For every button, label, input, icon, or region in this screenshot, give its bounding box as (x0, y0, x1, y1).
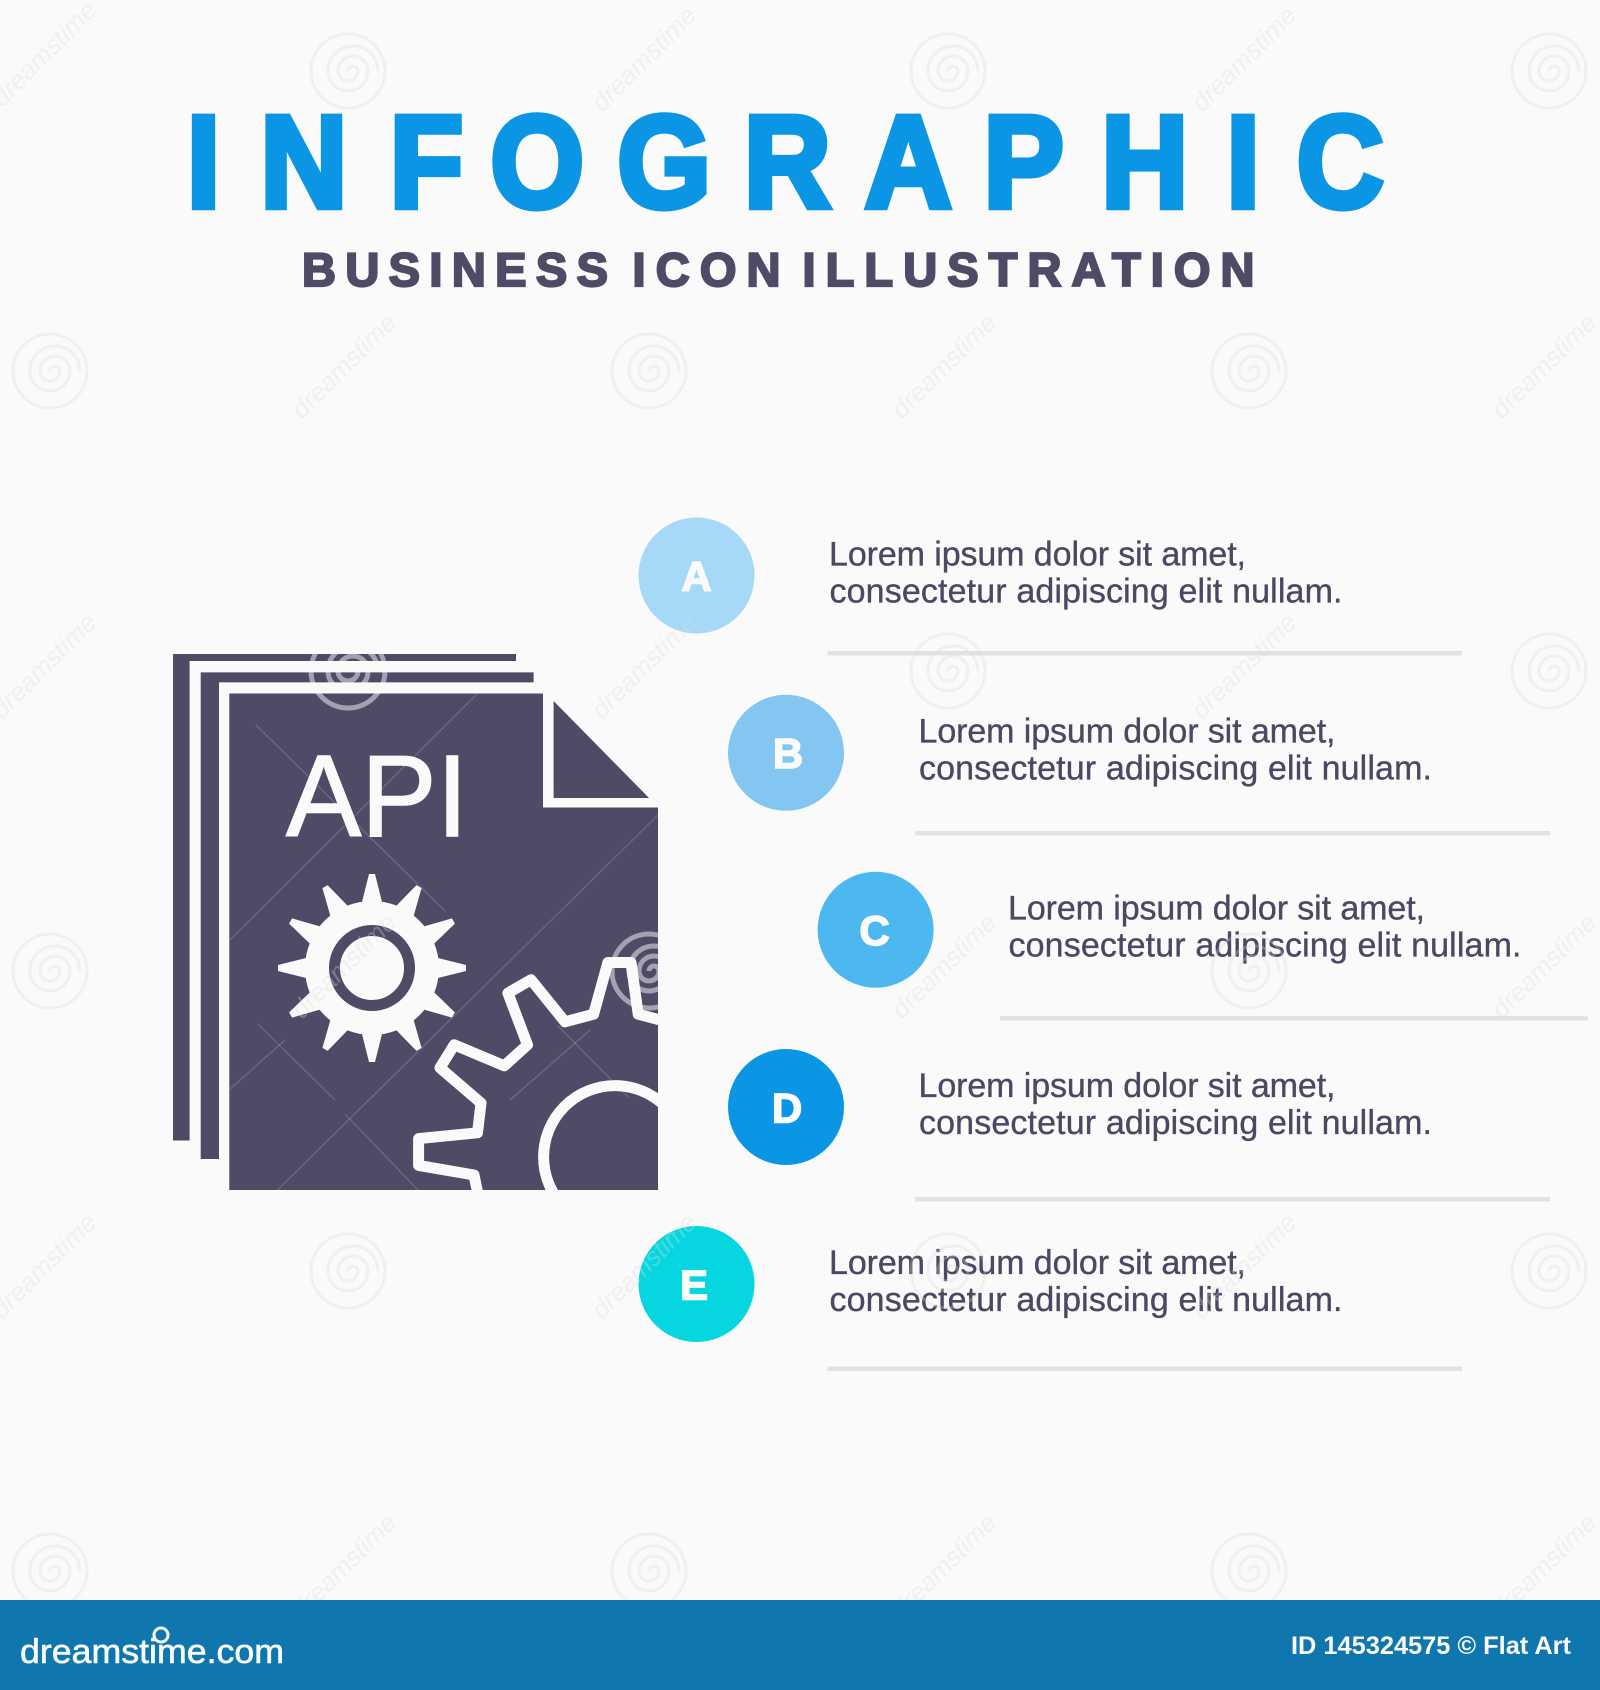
API label: API (286, 731, 468, 861)
main sheet (229, 694, 658, 1190)
text: dreamstime (1185, 1207, 1302, 1324)
badge D: D (772, 1084, 802, 1132)
text D: Lorem ipsum dolor sit amet, (918, 1067, 1336, 1105)
text: dreamstime (1185, 607, 1302, 724)
text: dreamstime (285, 907, 402, 1024)
subtitle: ICON (632, 243, 780, 296)
text: dreamstime (1485, 907, 1600, 1024)
badge E (638, 1226, 754, 1342)
text C (1008, 890, 1522, 964)
text: dreamstime (285, 1507, 402, 1624)
text: dreamstime (885, 1507, 1002, 1624)
footer credit: ID 145324575 © Flat Art (1291, 1632, 1572, 1660)
text D: consectetur adipiscing elit nullam. (919, 1104, 1432, 1142)
large gear outline (413, 957, 658, 1190)
subtitle: BUSINESS (302, 243, 608, 296)
badge E: E (680, 1262, 708, 1308)
text: dreamstime (885, 307, 1002, 424)
footer bar (0, 1600, 1600, 1690)
badge B: B (773, 730, 803, 777)
title: INFOGRAPHIC (187, 88, 1384, 235)
text C: Lorem ipsum dolor sit amet, (1008, 890, 1425, 928)
text: dreamstime (1485, 307, 1600, 424)
footer logo: dreamstime.com (20, 1633, 284, 1671)
text A: consectetur adipiscing elit nullam. (830, 572, 1342, 610)
item B (728, 695, 1550, 836)
badge A (638, 518, 754, 634)
text: dreamstime (585, 0, 702, 117)
text E (829, 1244, 1342, 1319)
text E: consectetur adipiscing elit nullam. (830, 1281, 1342, 1319)
text D (918, 1067, 1432, 1142)
text: dreamstime (585, 1207, 702, 1324)
text: dreamstime (285, 307, 402, 424)
back sheet (173, 654, 516, 1140)
item A (638, 518, 1462, 656)
item C (818, 872, 1588, 1020)
text A (829, 536, 1342, 610)
text A: Lorem ipsum dolor sit amet, (829, 536, 1246, 574)
small gear (278, 874, 466, 1062)
badge D (728, 1049, 844, 1165)
subtitle: ILLUSTRATION (802, 243, 1254, 296)
subtitle (302, 243, 1254, 296)
text: dreamstime (585, 607, 702, 724)
text B (918, 712, 1432, 788)
middle sheet (201, 672, 534, 1159)
text: dreamstime (1185, 0, 1302, 117)
text C: consectetur adipiscing elit nullam. (1008, 926, 1522, 964)
text E: Lorem ipsum dolor sit amet, (829, 1244, 1246, 1282)
badge C (818, 872, 934, 988)
text B: consectetur adipiscing elit nullam. (919, 750, 1432, 788)
folded corner (554, 701, 649, 798)
badge A: A (681, 553, 712, 600)
text B: Lorem ipsum dolor sit amet, (918, 712, 1336, 750)
badge C: C (859, 907, 890, 954)
text: dreamstime (885, 907, 1002, 1024)
text: dreamstime (1485, 1507, 1600, 1624)
item E (638, 1226, 1462, 1371)
badge B (728, 695, 844, 811)
item D (728, 1049, 1550, 1202)
icon: API document with gears (173, 654, 658, 1190)
